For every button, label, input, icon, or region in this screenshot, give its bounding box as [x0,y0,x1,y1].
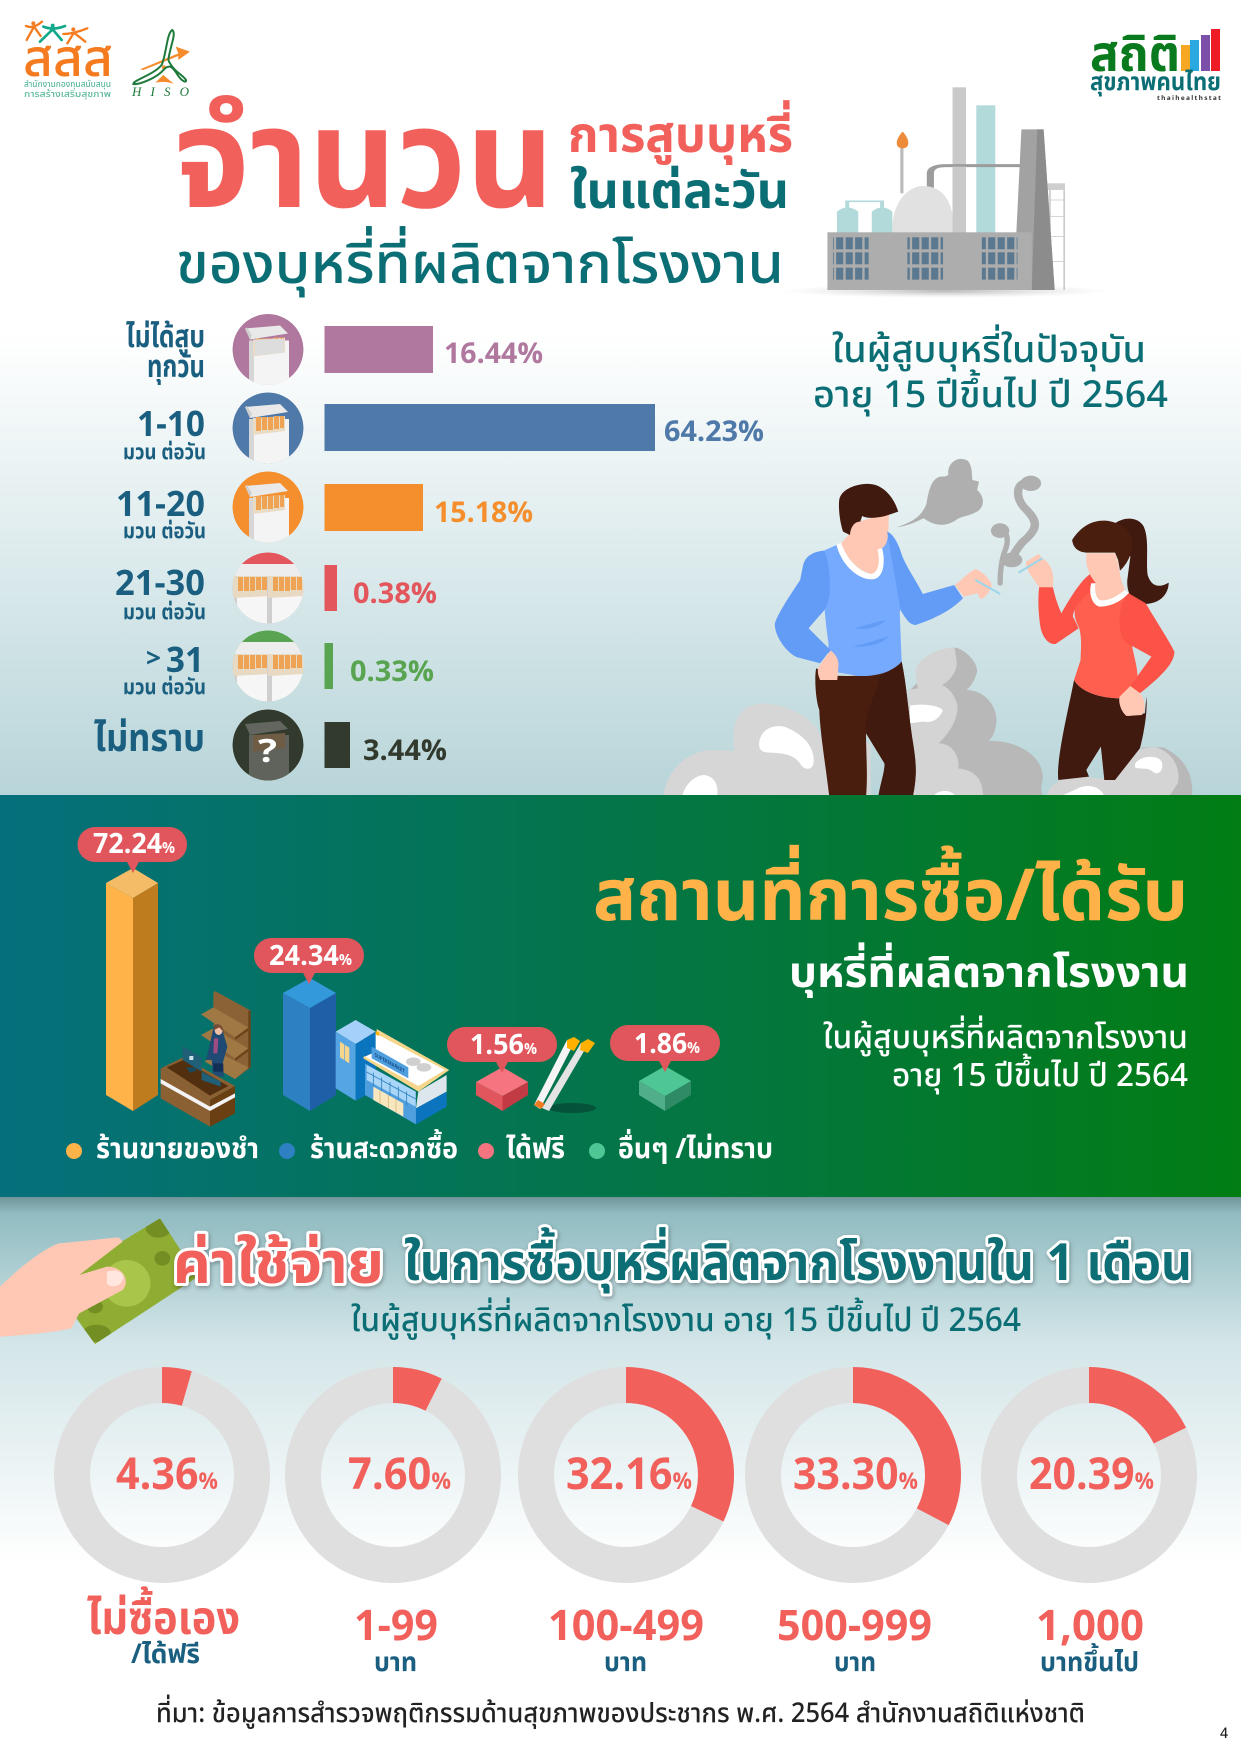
donut: 500-999 baht 33.30: 500-999 [777,1595,932,1659]
illustration: smoke puffs [897,459,1041,583]
donut: no purchase 4.36: ไม่ซื้อเอง [87,1585,240,1655]
donut: 100-499 baht 32.16 [536,1385,716,1684]
icon: two packs green [232,630,304,702]
row: 21-30 per day: 21-30 [115,558,205,611]
logo: ThaiHealth: สสส [23,22,113,100]
heading: purchase location: สถานที่การซื้อ/ได้รับ [593,845,1188,953]
legend: อื่นๆ /ไม่ทราบ [618,1128,773,1171]
icon: pack blue [232,392,304,468]
row: 21-30 per day: 0.38% [353,573,437,617]
donut: 500-999 baht 33.30 [763,1385,943,1684]
row: 21-30 per day [115,552,437,630]
row: over 31 per day: > [146,639,161,679]
donut: 500-999 baht 33.30: บาท [834,1643,876,1684]
heading: monthly cost [173,1222,1192,1310]
donut: 1000+ baht 20.39: บาทขึ้นไป [1040,1643,1139,1684]
row: 1-10 per day: 1-10 [137,399,205,452]
heading: monthly cost: ค่าใช้จ่าย [173,1222,384,1310]
icon: cigarettes [534,1037,596,1113]
bar: free 1.56 [447,1024,557,1111]
row: 11-20 per day [116,472,533,548]
illustration: man [775,484,1000,797]
donut: 100-499 baht 32.16: 100-499 [548,1595,704,1659]
bar: other 1.86 [610,1023,720,1111]
bar: grocery 72.24 [78,823,187,1111]
illustration: convenience store: SUPERMARKET [375,1051,405,1076]
bar: convenience 24.34 [254,935,364,1111]
text: cost population note: ในผู้สูบบุหรี่ที่ผลิตจากโรงงาน อายุ 15 ปีขึ้นไป ปี 2564 [351,1296,1021,1346]
row: over 31 per day: 0.33% [350,651,434,695]
panel: monthly cost [0,1197,1241,1754]
source note: ที่มา: ข้อมูลการสำรวจพฤติกรรมด้านสุขภาพของประชากร พ.ศ. 2564 สำนักงานสถิติแห่งชาติ [156,1694,1085,1735]
donut: 100-499 baht 32.16: 32.16% [566,1442,692,1509]
donut: 1-99 baht 7.60: บาท [374,1643,417,1684]
heading: purchase location: บุหรี่ที่ผลิตจากโรงงาน [789,942,1189,1007]
logo: ThaiHealth: การสร้างเสริมสุขภาพ [24,88,111,102]
row: 1-10 per day: 64.23% [664,411,764,455]
row: unknown: ไม่ทราบ [94,712,205,769]
donut: 500-999 baht 33.30: 33.30% [793,1442,918,1509]
title: จำนวน [174,58,554,270]
logo: Thai health statistics: สถิติ [1090,18,1180,94]
donut: 1-99 baht 7.60 [303,1385,483,1684]
donut: no purchase 4.36: /ได้ฟรี [131,1635,200,1676]
row: 21-30 per day: มวน ต่อวัน [123,598,206,629]
logo: Thai health statistics [1090,18,1221,103]
illustration: smokers and smoke [664,459,1192,797]
donut: no purchase 4.36: 4.36% [116,1442,218,1509]
row: over 31 per day: มวน ต่อวัน [123,673,206,704]
bar: convenience 24.34: 24.34% [269,935,352,978]
icon: pack purple [232,314,304,390]
row: 1-10 per day [123,392,764,469]
text: population note: ในผู้สูบบุหรี่ในปัจจุบัน [832,323,1146,379]
donut: no purchase 4.36 [72,1385,252,1676]
donut: 1000+ baht 20.39: 1,000 [1036,1595,1144,1659]
panel: purchase location [0,795,1241,1197]
illustration: clouds [664,647,1192,797]
row: unknown [94,710,447,785]
icon: unknown pack [232,710,304,785]
bar: free 1.56: 1.56% [470,1024,537,1067]
text: population note: อายุ 15 ปีขึ้นไป ปี 2564 [813,368,1168,424]
text: purchase population note: ในผู้สูบบุหรี่ที่ผลิตจากโรงงาน [823,1015,1188,1063]
logo: Thai health statistics: สุขภาพคนไทย [1090,64,1221,102]
row: not daily: 16.44% [444,333,543,377]
logo: ThaiHealth: สำนักงานกองทุนสนับสนุน [24,78,111,92]
illustration: woman [1019,519,1174,780]
legend: ร้านขายของชำ [96,1128,259,1171]
donut: 1000+ baht 20.39: 20.39% [1029,1442,1154,1509]
legend: ได้ฟรี [506,1128,565,1171]
row: over 31 per day: 31 [166,635,204,688]
row: not daily [126,314,543,391]
row: over 31 per day [123,630,434,708]
icon: hand with banknote [0,1218,198,1344]
logo: HISO: H I S O [131,84,190,99]
illustration: shop assistant [206,1024,227,1077]
donut: 1-99 baht 7.60: 7.60% [348,1442,451,1509]
row: not daily: ทุกวัน [147,344,205,391]
row: not daily: ไม่ได้สูบ [126,314,205,361]
heading: purchase location [593,845,1189,1007]
donut: 100-499 baht 32.16: บาท [604,1643,647,1684]
bar: other 1.86: 1.86% [634,1023,700,1066]
icon: pack orange [232,472,304,547]
row: 11-20 per day: 11-20 [116,479,205,532]
logo: Thai health statistics: thaihealthstat [1157,93,1221,103]
row: unknown: 3.44% [363,730,447,774]
illustration: grocery shop [161,991,251,1127]
row: 11-20 per day: 15.18% [434,492,533,536]
icon: two packs red [232,552,304,624]
text: purchase population note: อายุ 15 ปีขึ้นไป ปี 2564 [892,1053,1188,1101]
title [174,58,793,309]
row: 11-20 per day: มวน ต่อวัน [123,517,206,548]
donut: 1000+ baht 20.39 [999,1385,1179,1684]
bar: grocery 72.24: 72.24% [93,823,175,866]
donut: 1-99 baht 7.60: 1-99 [354,1595,438,1659]
text: population note [813,323,1168,424]
logo: HISO [131,30,190,99]
icon: unknown pack: ? [258,729,277,777]
icon: factory [780,87,1110,298]
title: การสูบบุหรี่ [568,99,793,175]
row: 1-10 per day: มวน ต่อวัน [123,438,206,469]
illustration: convenience store [336,1020,449,1124]
panel: daily smoking amount [0,0,1241,797]
title: ของบุหรี่ที่ผลิตจากโรงงาน [176,225,784,309]
page number: 4 [1220,1724,1228,1745]
legend [66,1128,773,1171]
heading: monthly cost: ในการซื้อบุหรี่ผลิตจากโรงงานใน 1 เดือน [404,1226,1192,1303]
title: ในแต่ละวัน [570,155,789,231]
text: purchase population note [823,1015,1188,1101]
legend: ร้านสะดวกซื้อ [310,1128,458,1171]
